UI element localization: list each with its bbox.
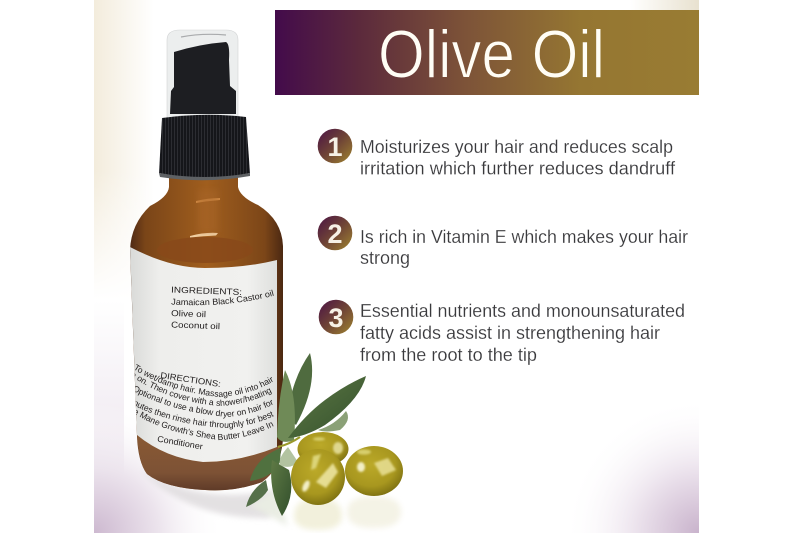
number badge 3 (319, 300, 353, 334)
ingredients text: Olive oil (171, 308, 206, 319)
bottle base (137, 432, 280, 490)
directions text: Leave on. Then cover with a shower/heating (134, 373, 272, 406)
directions text: To wet/damp hair. Massage oil into hair (135, 364, 273, 398)
number badge 1 (318, 129, 352, 163)
title banner (275, 10, 699, 95)
benefit 3 (319, 300, 685, 365)
collar (159, 115, 250, 178)
clear cap (167, 30, 238, 118)
black pump (170, 42, 236, 114)
product label (130, 247, 277, 462)
benefit 1 text: irritation which further reduces dandruff (360, 158, 676, 178)
directions text: 10 minutes then rinse hair throughly for best (136, 401, 274, 430)
benefit 1 text: Moisturizes your hair and reduces scalp (360, 137, 673, 157)
benefit 3 text: from the root to the tip (360, 345, 537, 365)
leaves (246, 353, 366, 516)
ingredients text (171, 285, 274, 331)
ingredients text: Jamaican Black Castor oil (171, 290, 274, 306)
olive front (291, 449, 345, 505)
number badge 2 (318, 216, 352, 250)
benefit 3 text: Essential nutrients and monounsaturated (360, 301, 685, 321)
directions text: Use Mane Growth's Shea Butter Leave In (136, 410, 274, 440)
olive right (345, 446, 403, 496)
benefit 3 text: fatty acids assist in strengthening hair (360, 323, 660, 343)
background panel (94, 0, 699, 533)
directions text: Optional to use a blow dryer on hair for (135, 386, 272, 418)
directions text (134, 364, 274, 450)
directions text: Conditioner (157, 434, 204, 451)
reflections on surface (140, 470, 401, 530)
glass highlights (157, 190, 253, 263)
number badge 3: 3 (328, 303, 344, 333)
benefit 1 (318, 129, 676, 178)
bottle glass (130, 170, 283, 490)
ingredients text: INGREDIENTS: (171, 285, 242, 297)
bottle (130, 30, 283, 490)
olive branch (246, 353, 403, 516)
title: Olive Oil (378, 16, 605, 92)
number badge 2: 2 (327, 219, 343, 249)
ingredients text: Coconut oil (171, 320, 220, 331)
benefit 2 text: Is rich in Vitamin E which makes your hair (360, 227, 688, 247)
benefit 2 text: strong (360, 248, 410, 268)
number badge 1: 1 (327, 132, 343, 162)
benefit 2 (318, 216, 688, 268)
directions text: DIRECTIONS: (160, 370, 222, 389)
olive back (298, 432, 348, 466)
